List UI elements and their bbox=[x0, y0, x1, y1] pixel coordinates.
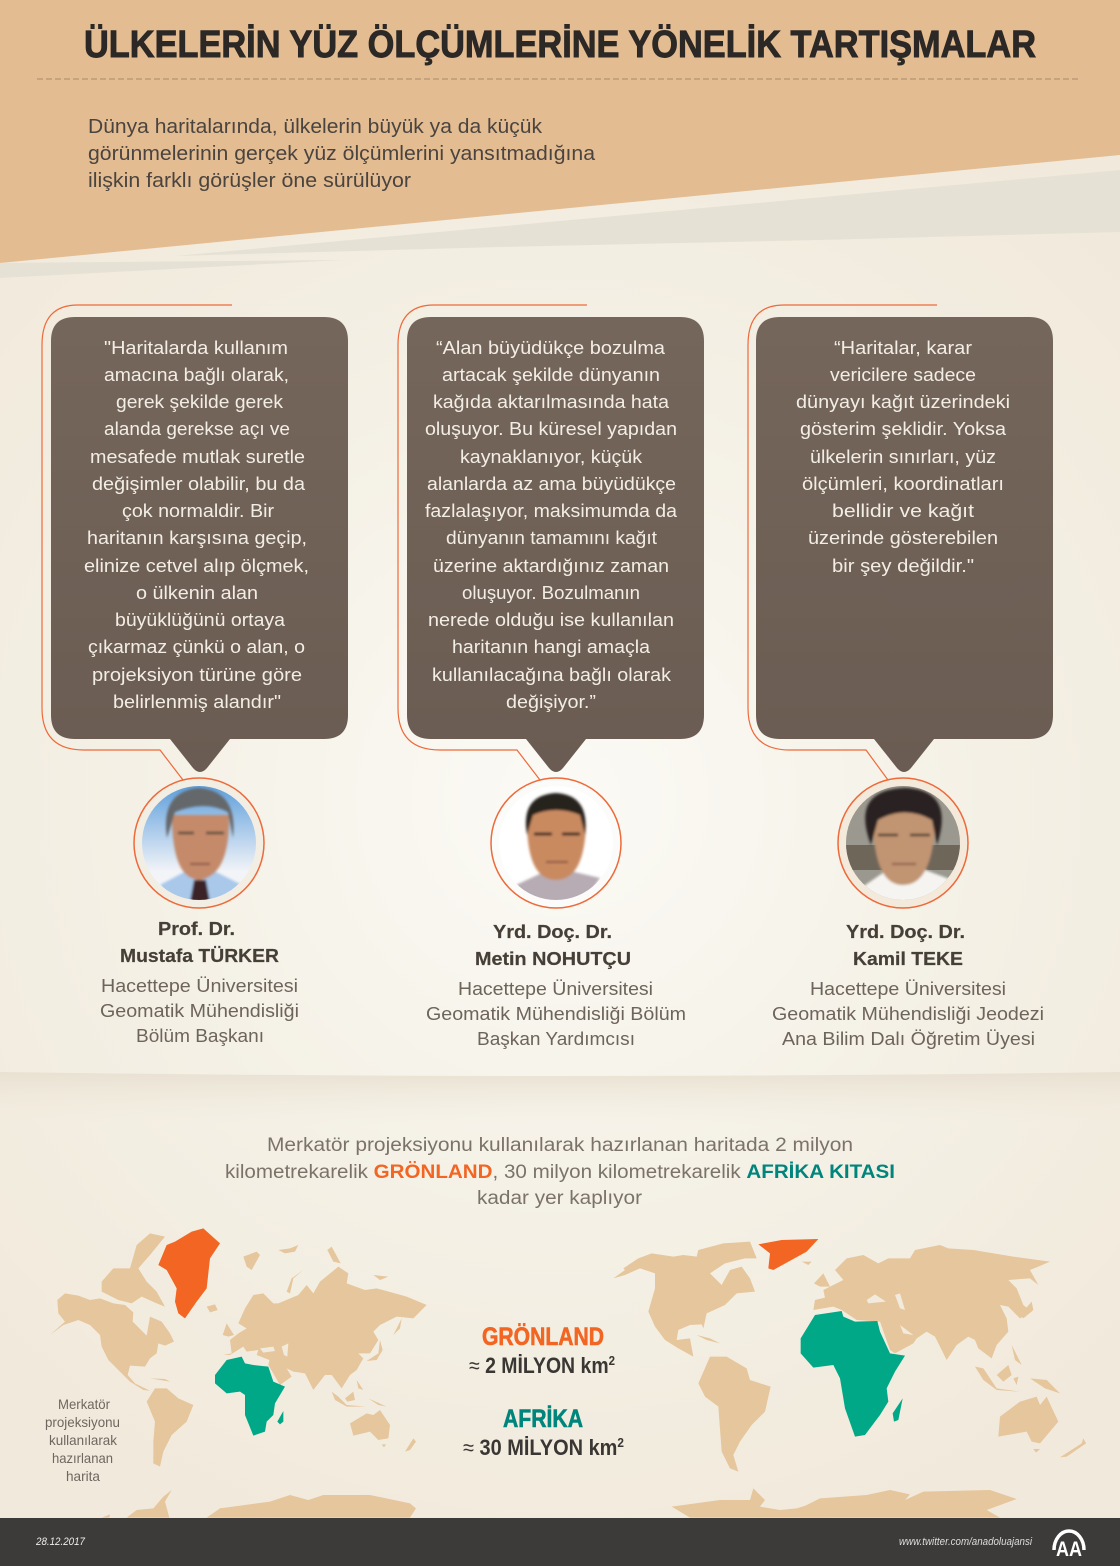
quote text 1: çıkarmaz çünkü o alan, o bbox=[88, 636, 305, 657]
quote text 3: dünyayı kağıt üzerindeki bbox=[796, 391, 1010, 412]
person 2 caption bbox=[426, 922, 686, 1049]
person 3 caption: Kamil TEKE bbox=[853, 949, 963, 969]
quote text 3: bir şey değildir." bbox=[832, 555, 974, 576]
Africa right bbox=[801, 1311, 905, 1437]
left map: Old World bbox=[210, 1245, 427, 1518]
icon: AA logo bbox=[1054, 1531, 1084, 1561]
person 2 caption: Hacettepe Üniversitesi bbox=[458, 979, 653, 999]
quote text 1: büyüklüğünü ortaya bbox=[115, 609, 286, 630]
quote text 2: dünyanın tamamını kağıt bbox=[446, 527, 657, 548]
person 3 caption: Yrd. Doç. Dr. bbox=[846, 922, 965, 942]
bubble 1 bbox=[51, 317, 348, 772]
left map caption: hazırlanan bbox=[52, 1450, 113, 1466]
quote text 3: gösterim şeklidir. Yoksa bbox=[800, 418, 1007, 439]
quote text 2: oluşuyor. Bu küresel yapıdan bbox=[425, 418, 677, 439]
quote text 1: belirlenmiş alandır" bbox=[113, 691, 281, 712]
title divider bbox=[37, 78, 1081, 80]
title: ÜLKELERİN YÜZ ÖLÇÜMLERİNE YÖNELİK TARTIŞMALAR bbox=[84, 23, 1036, 66]
Mercator description bbox=[225, 1135, 895, 1209]
stat: Grönland bbox=[469, 1322, 615, 1378]
quote text 3: “Haritalar, karar bbox=[834, 337, 972, 358]
quote text 1: o ülkenin alan bbox=[136, 582, 258, 603]
quote text 2: nerede olduğu ise kullanılan bbox=[428, 609, 674, 630]
left map caption bbox=[45, 1396, 120, 1484]
bubble 2 bbox=[407, 317, 704, 772]
Greenland left bbox=[158, 1228, 220, 1318]
Mercator description: Merkatör projeksiyonu kullanılarak hazırlanan haritada 2 milyon bbox=[267, 1135, 853, 1156]
quote text 2: artacak şekilde dünyanın bbox=[442, 364, 660, 385]
person 2 caption: Geomatik Mühendisliği Bölüm bbox=[426, 1004, 686, 1024]
left map caption: kullanılarak bbox=[49, 1432, 118, 1448]
person 3 caption bbox=[772, 922, 1044, 1049]
stat: Grönland: 2 bbox=[609, 1353, 615, 1368]
person 1 caption: Prof. Dr. bbox=[158, 919, 235, 939]
quote text 2: alanlarda az ama büyüdükçe bbox=[427, 473, 676, 494]
left map caption: projeksiyonu bbox=[45, 1414, 120, 1430]
footer url: www.twitter.com/anadoluajansi bbox=[899, 1536, 1032, 1548]
quote text 2: üzerine aktardığınız zaman bbox=[433, 555, 669, 576]
stat: Grönland: ≈ 2 MİLYON km bbox=[469, 1353, 626, 1378]
person 3 caption: Geomatik Mühendisliği Jeodezi bbox=[772, 1004, 1044, 1024]
quote text 1: alanda gerekse açı ve bbox=[104, 418, 290, 439]
quote text 2: oluşuyor. Bozulmanın bbox=[462, 582, 640, 603]
intro text: Dünya haritalarında, ülkelerin büyük ya da küçük bbox=[88, 116, 543, 138]
quote text 1: haritanın karşısına geçip, bbox=[87, 527, 307, 548]
outline 3 bbox=[748, 305, 937, 780]
intro text: görünmelerinin gerçek yüz ölçümlerini yansıtmadığına bbox=[88, 143, 596, 165]
quote text 1: çok normaldir. Bir bbox=[122, 500, 274, 521]
quote text 2: haritanın hangi amaçla bbox=[452, 636, 651, 657]
footer bar bbox=[0, 1518, 1120, 1566]
Madagascar right bbox=[893, 1398, 903, 1422]
left map caption: Merkatör bbox=[58, 1396, 110, 1412]
quote text 2: fazlalaşıyor, maksimumda da bbox=[425, 500, 678, 521]
person 1 caption bbox=[100, 919, 299, 1046]
stat: Grönland: GRÖNLAND bbox=[482, 1322, 604, 1351]
stat: Afrika: 2 bbox=[617, 1435, 624, 1450]
portrait 2 bbox=[491, 778, 621, 908]
Mercator description: kadar yer kaplıyor bbox=[477, 1188, 643, 1209]
quote text 3: ölçümleri, koordinatları bbox=[802, 473, 1004, 494]
intro text: ilişkin farklı görüşler öne sürülüyor bbox=[88, 170, 411, 192]
quote text 1: projeksiyon türüne göre bbox=[92, 664, 302, 685]
stat: Afrika bbox=[463, 1405, 624, 1460]
quote text 1: elinize cetvel alıp ölçmek, bbox=[84, 555, 309, 576]
header band bbox=[0, 0, 1120, 263]
quote text 1: "Haritalarda kullanım bbox=[104, 337, 288, 358]
quote text 2: kaynaklanıyor, küçük bbox=[460, 446, 643, 467]
quote text 1: değişimler olabilir, bu da bbox=[92, 473, 306, 494]
outline 2 bbox=[398, 305, 587, 780]
quote text 1: gerek şekilde gerek bbox=[116, 391, 284, 412]
header streaks bbox=[0, 170, 1120, 278]
Greenland right bbox=[758, 1239, 818, 1270]
portrait 1 bbox=[134, 778, 264, 908]
Africa left bbox=[215, 1357, 285, 1436]
person 1 caption: Geomatik Mühendisliği bbox=[100, 1001, 299, 1021]
left map caption: harita bbox=[66, 1468, 100, 1484]
right map: Old World bbox=[800, 1245, 1086, 1518]
outline 1 bbox=[42, 305, 232, 780]
quote text 1: mesafede mutlak suretle bbox=[90, 446, 305, 467]
person 2 caption: Metin NOHUTÇU bbox=[475, 949, 631, 969]
Mercator description: kilometrekarelik GRÖNLAND , 30 milyon kilometrekarelik AFRİKA KITASI bbox=[225, 1162, 895, 1183]
quote text 2: kullanılacağına bağlı olarak bbox=[432, 664, 672, 685]
person 2 caption: Yrd. Doç. Dr. bbox=[493, 922, 612, 942]
footer date: 28.12.2017 bbox=[35, 1536, 86, 1548]
quote text 3 bbox=[796, 337, 1010, 576]
intro text bbox=[88, 116, 596, 192]
person 3 caption: Hacettepe Üniversitesi bbox=[810, 979, 1006, 999]
quote text 1 bbox=[84, 337, 309, 712]
quote text 3: üzerinde gösterebilen bbox=[808, 527, 998, 548]
quote text 2: kağıda aktarılmasında hata bbox=[433, 391, 670, 412]
quote text 2 bbox=[425, 337, 678, 712]
panel: quote 1 bbox=[42, 305, 348, 780]
quote text 2: değişiyor.” bbox=[506, 691, 596, 712]
person 1 caption: Mustafa TÜRKER bbox=[120, 946, 279, 966]
panel: quote 2 bbox=[398, 305, 704, 780]
quote text 2: “Alan büyüdükçe bozulma bbox=[436, 337, 666, 358]
lower section shade bbox=[0, 1072, 1120, 1125]
stat: Afrika: ≈ 30 MİLYON km bbox=[463, 1435, 632, 1460]
person 1 caption: Hacettepe Üniversitesi bbox=[101, 976, 298, 996]
right map: Americas bbox=[613, 1239, 830, 1518]
quote text 3: vericilere sadece bbox=[830, 364, 976, 385]
icon: AA logo: AA bbox=[1056, 1538, 1082, 1561]
Madagascar left bbox=[277, 1411, 283, 1424]
portrait 3 bbox=[838, 778, 968, 908]
left map: Mercator bbox=[50, 1228, 427, 1518]
panel: quote 3 bbox=[748, 305, 1053, 780]
quote text 3: bellidir ve kağıt bbox=[832, 500, 974, 521]
person 3 caption: Ana Bilim Dalı Öğretim Üyesi bbox=[782, 1029, 1035, 1049]
quote text 3: ülkelerin sınırları, yüz bbox=[810, 446, 996, 467]
person 1 caption: Bölüm Başkanı bbox=[136, 1026, 264, 1046]
stat: Afrika: AFRİKA bbox=[503, 1405, 583, 1433]
person 2 caption: Başkan Yardımcısı bbox=[477, 1029, 635, 1049]
left map: Americas bbox=[50, 1228, 260, 1518]
bubble 3 bbox=[756, 317, 1053, 772]
quote text 1: amacına bağlı olarak, bbox=[104, 364, 289, 385]
right map: equal-area bbox=[613, 1239, 1086, 1518]
